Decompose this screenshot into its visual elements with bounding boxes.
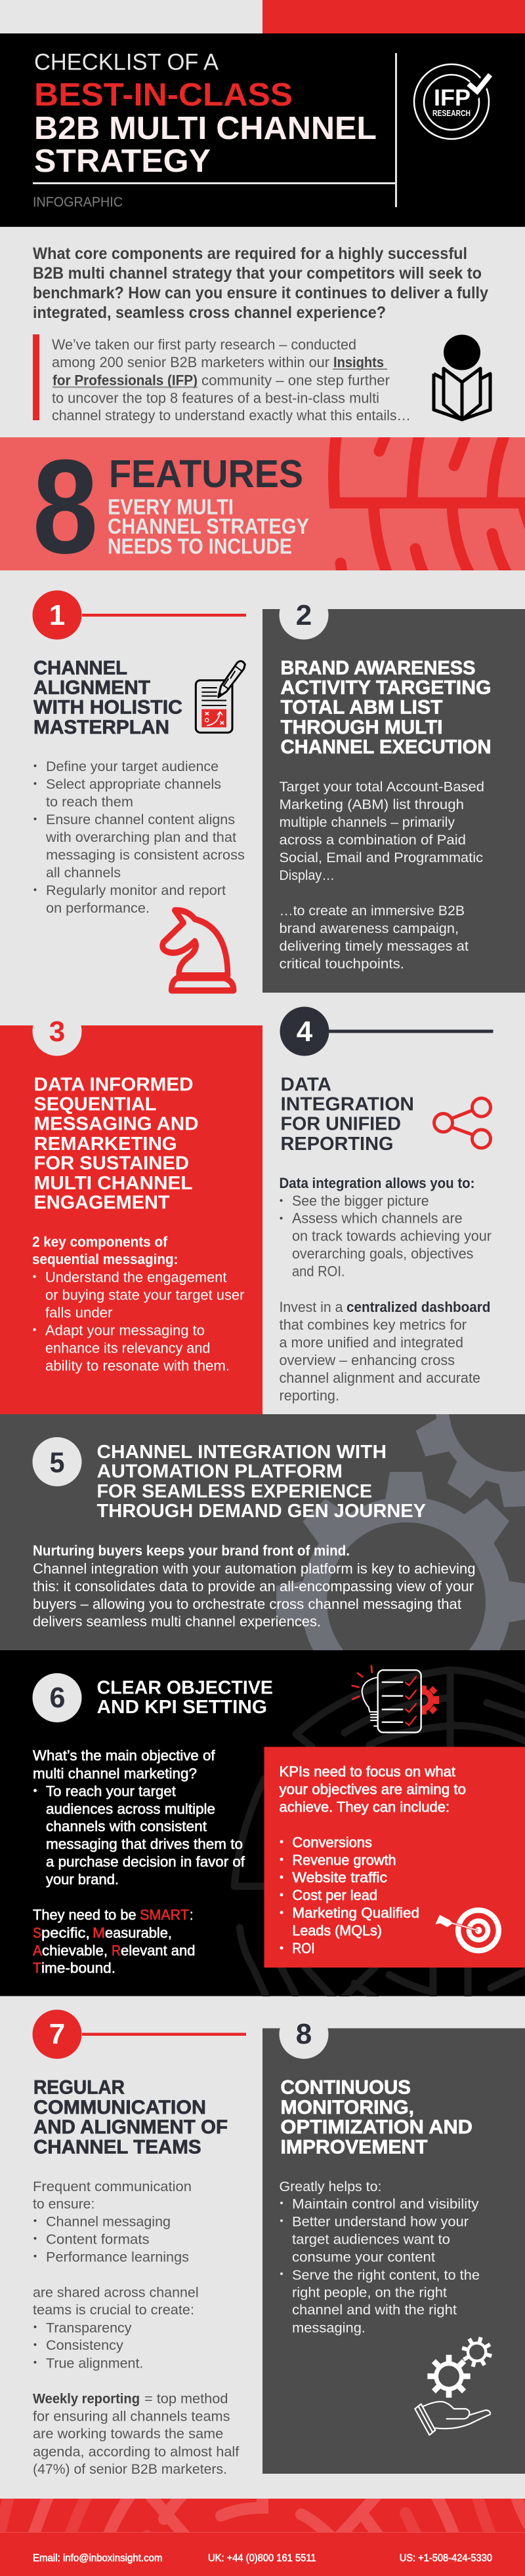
big number 8: 8 bbox=[33, 432, 98, 582]
body text 6: audiences across multiple bbox=[46, 1800, 215, 1817]
heading 2: TOTAL ABM LIST bbox=[281, 697, 442, 719]
body text 2: delivering timely messages at bbox=[280, 939, 469, 954]
body text 3: 2 key components of bbox=[32, 1234, 168, 1250]
panel: KPI callout: Website traffic bbox=[292, 1869, 387, 1886]
heading 7: CHANNEL TEAMS bbox=[33, 2136, 201, 2158]
decorative gears bbox=[276, 1414, 525, 1650]
intro question: B2B multi channel strategy that your competitors will seek to bbox=[33, 264, 482, 283]
icon: chess knight bbox=[163, 910, 234, 991]
body text 3 bbox=[32, 1234, 244, 1374]
body text 8: Serve the right content, to the bbox=[292, 2268, 480, 2283]
decorative footer pattern bbox=[0, 2499, 525, 2532]
body text 6: What’s the main objective of bbox=[33, 1747, 215, 1764]
body text 7: for ensuring all channels teams bbox=[33, 2409, 230, 2425]
body text 5: this: it consolidates data to provide an all-encompassing view of your bbox=[33, 1578, 474, 1595]
title: B2B MULTI CHANNEL bbox=[34, 111, 377, 146]
body text 3: sequential messaging: bbox=[32, 1251, 178, 1267]
panel: feature 4 bbox=[280, 1007, 494, 1404]
body text 2: Target your total Account-Based bbox=[280, 780, 484, 795]
icon: IFP research logo: IFP bbox=[434, 85, 471, 111]
number badge 5 bbox=[33, 1437, 81, 1486]
panel: KPI callout: ROI bbox=[292, 1940, 315, 1956]
body text 4: centralized dashboard bbox=[346, 1299, 490, 1315]
body text 6: channels with consistent bbox=[46, 1818, 207, 1834]
icon: gears above hand bbox=[415, 2337, 492, 2435]
heading 8 bbox=[281, 2077, 472, 2158]
body text 6: easurable, bbox=[105, 1924, 172, 1941]
number badge 8 bbox=[280, 2010, 328, 2059]
contact details: US: +1-508-424-5330 bbox=[400, 2552, 492, 2564]
heading 2: ACTIVITY TARGETING bbox=[281, 677, 491, 698]
heading 2: THROUGH MULTI bbox=[281, 717, 442, 738]
body text 6: pecific, bbox=[41, 1924, 90, 1941]
body text 8: consume your content bbox=[292, 2250, 435, 2265]
heading 4: DATA bbox=[281, 1075, 331, 1096]
icon: bulb checklist and gear bbox=[352, 1666, 439, 1732]
body text 8: target audiences want to bbox=[292, 2232, 450, 2247]
bullet list 1: Regularly monitor and report bbox=[46, 883, 226, 898]
panel: KPI callout: Conversions bbox=[292, 1834, 372, 1850]
icon: share nodes bbox=[434, 1098, 491, 1148]
body text 8: Greatly helps to: bbox=[280, 2179, 382, 2194]
heading 7: REGULAR bbox=[33, 2077, 125, 2099]
intro question bbox=[33, 245, 488, 322]
bullet list 1: with overarching plan and that bbox=[45, 830, 236, 845]
body text 7: (47%) of senior B2B marketers. bbox=[33, 2462, 227, 2477]
panel: 8 features banner bbox=[0, 437, 525, 570]
heading 3: DATA INFORMED bbox=[34, 1075, 193, 1096]
bullet list 1: Define your target audience bbox=[46, 759, 219, 774]
intro question: What core components are required for a highly successful bbox=[33, 245, 467, 263]
body text 4: overview – enhancing cross bbox=[280, 1352, 455, 1368]
title: BEST-IN-CLASS bbox=[34, 77, 293, 113]
heading 2: CHANNEL EXECUTION bbox=[281, 736, 491, 758]
body text 7: True alignment. bbox=[46, 2356, 143, 2371]
body text 7: Consistency bbox=[46, 2338, 123, 2353]
body text 7: Content formats bbox=[46, 2232, 150, 2247]
intro paragraph: We’ve taken our first party research – conducted bbox=[52, 336, 356, 353]
body text 5 bbox=[33, 1543, 475, 1630]
number badge 7: 7 bbox=[49, 2018, 65, 2050]
body text 7: Channel messaging bbox=[46, 2215, 171, 2230]
number badge 1: 1 bbox=[49, 599, 65, 631]
body text 6: elevant and bbox=[121, 1942, 195, 1958]
body text 4: channel alignment and accurate bbox=[280, 1370, 480, 1386]
icon: IFP research logo: RESEARCH bbox=[432, 108, 471, 118]
heading 4 bbox=[281, 1075, 414, 1155]
bullet list 1: all channels bbox=[46, 865, 121, 881]
body text 6: S bbox=[33, 1924, 41, 1941]
body text 6: : bbox=[190, 1907, 193, 1923]
body text 4: Assess which channels are bbox=[292, 1210, 463, 1227]
body text 4: See the bigger picture bbox=[292, 1193, 429, 1209]
bullet list 1: messaging is consistent across bbox=[46, 848, 245, 863]
body text 6: a purchase decision in favor of bbox=[46, 1853, 245, 1870]
body text 4: a more unified and integrated bbox=[280, 1334, 463, 1351]
heading 1: WITH HOLISTIC bbox=[33, 697, 182, 719]
heading 3 bbox=[34, 1075, 198, 1214]
panel: KPI callout bbox=[264, 1747, 525, 1968]
body text 8: messaging. bbox=[292, 2321, 366, 2335]
heading 7: COMMUNICATION bbox=[33, 2097, 206, 2118]
bullet list 1: to reach them bbox=[46, 795, 133, 810]
heading 1: MASTERPLAN bbox=[33, 717, 169, 738]
contact details: UK: +44 (0)800 161 5511 bbox=[208, 2552, 316, 2564]
body text 4 bbox=[280, 1175, 492, 1404]
body text 2: Social, Email and Programmatic bbox=[280, 850, 483, 865]
body text 8: Maintain control and visibility bbox=[292, 2196, 479, 2212]
panel: feature 2 bbox=[262, 590, 525, 993]
heading 8: OPTIMIZATION AND bbox=[281, 2116, 472, 2138]
intro paragraph: among 200 senior B2B marketers within our bbox=[52, 354, 329, 370]
body text 8 bbox=[280, 2179, 480, 2335]
bullet list 1: on performance. bbox=[46, 901, 150, 916]
body text 5: Channel integration with your automation platform is key to achieving bbox=[33, 1560, 475, 1577]
body text 2: Marketing (ABM) list through bbox=[280, 797, 464, 812]
bullet list 1 bbox=[34, 759, 245, 916]
subheading bbox=[108, 495, 309, 559]
heading 5: AUTOMATION PLATFORM bbox=[97, 1461, 343, 1482]
heading 3: REMARKETING bbox=[34, 1134, 177, 1155]
panel: feature 8 bbox=[262, 2010, 525, 2474]
panel: feature 7 bbox=[33, 2010, 246, 2477]
body text 2 bbox=[280, 780, 484, 972]
panel: header bbox=[0, 33, 525, 227]
intro paragraph bbox=[33, 334, 411, 424]
subheading: EVERY MULTI bbox=[108, 495, 234, 519]
body text 7: Performance learnings bbox=[46, 2250, 189, 2265]
heading 5: CHANNEL INTEGRATION WITH bbox=[97, 1442, 387, 1463]
panel: feature 3 bbox=[0, 1007, 262, 1415]
panel: feature 1 bbox=[33, 590, 246, 991]
body text 7: are shared across channel bbox=[33, 2286, 199, 2301]
body text 6: T bbox=[33, 1960, 41, 1976]
panel: feature 6 bbox=[0, 1650, 525, 2000]
body text 6: your brand. bbox=[46, 1871, 119, 1888]
number badge 2 bbox=[280, 590, 328, 640]
body text 2: brand awareness campaign, bbox=[280, 921, 459, 936]
body text 6: M bbox=[93, 1924, 105, 1941]
body text 5: buyers – allowing you to orchestrate cross channel messaging that bbox=[33, 1596, 461, 1612]
panel: KPI callout: Marketing Qualified bbox=[292, 1905, 419, 1921]
body text 4: Data integration allows you to: bbox=[280, 1175, 475, 1191]
body text 2: multiple channels – primarily bbox=[280, 815, 455, 830]
heading 3: MESSAGING AND bbox=[34, 1114, 198, 1135]
body text 6: ime-bound. bbox=[41, 1960, 116, 1976]
body text 3: ability to resonate with them. bbox=[45, 1358, 230, 1374]
icon: IFP research logo bbox=[414, 64, 490, 139]
body text 7: Frequent communication bbox=[33, 2179, 192, 2194]
heading: FEATURES bbox=[109, 452, 303, 496]
panel: KPI callout: Cost per lead bbox=[292, 1887, 377, 1903]
body text 6: R bbox=[112, 1942, 121, 1958]
body text 8: Better understand how your bbox=[292, 2215, 469, 2230]
heading 3: ENGAGEMENT bbox=[34, 1193, 170, 1214]
number badge 4 bbox=[280, 1007, 329, 1056]
body text 4: and ROI. bbox=[292, 1263, 345, 1280]
title: CHECKLIST OF A bbox=[34, 50, 219, 75]
intro paragraph: channel strategy to understand exactly what this entails… bbox=[52, 407, 411, 424]
intro paragraph: community – one step further bbox=[201, 372, 390, 388]
body text 2: …to create an immersive B2B bbox=[280, 903, 465, 919]
body text 4: overarching goals, objectives bbox=[292, 1246, 473, 1262]
icon: plan document and pencil bbox=[196, 661, 245, 732]
heading 2 bbox=[281, 658, 491, 758]
decorative maze bbox=[334, 433, 525, 577]
body text 2: Display… bbox=[280, 868, 335, 883]
heading 5 bbox=[97, 1442, 426, 1522]
subheading: CHANNEL STRATEGY bbox=[108, 514, 309, 538]
number badge 3: 3 bbox=[49, 1016, 65, 1048]
body text 5: Nurturing buyers keeps your brand front of mind. bbox=[33, 1543, 350, 1559]
body text 4: reporting. bbox=[280, 1387, 339, 1404]
heading 8: MONITORING, bbox=[281, 2097, 414, 2118]
number badge 1 bbox=[33, 590, 81, 640]
intro paragraph: Insights bbox=[333, 354, 384, 370]
body text 8: right people, on the right bbox=[292, 2286, 447, 2301]
number badge 5: 5 bbox=[50, 1446, 64, 1479]
heading 8: CONTINUOUS bbox=[281, 2077, 411, 2099]
body text 4: Invest in a bbox=[280, 1299, 343, 1315]
heading 8: IMPROVEMENT bbox=[281, 2136, 428, 2158]
body text 6: SMART bbox=[140, 1907, 189, 1923]
body text 7: teams is crucial to create: bbox=[33, 2303, 194, 2318]
body text 5: delivers seamless multi channel experiences. bbox=[33, 1614, 321, 1630]
panel: KPI callout: Leads (MQLs) bbox=[292, 1922, 382, 1939]
body text 4: that combines key metrics for bbox=[280, 1317, 467, 1333]
heading 5: FOR SEAMLESS EXPERIENCE bbox=[97, 1481, 372, 1502]
number badge 2: 2 bbox=[296, 599, 312, 631]
footer bbox=[0, 2495, 525, 2576]
heading 6: AND KPI SETTING bbox=[97, 1697, 267, 1718]
intro paragraph: to uncover the top 8 features of a best-in-class multi bbox=[52, 389, 379, 406]
panel: KPI callout: KPIs need to focus on what bbox=[280, 1763, 455, 1779]
body text 6: chievable, bbox=[42, 1942, 108, 1958]
body text 7: Transparency bbox=[46, 2321, 132, 2335]
panel: feature 5 bbox=[0, 1414, 525, 1650]
heading 1: ALIGNMENT bbox=[33, 677, 150, 698]
subtitle: INFOGRAPHIC bbox=[33, 195, 123, 210]
body text 4: on track towards achieving your bbox=[292, 1228, 492, 1244]
top colour band bbox=[0, 0, 525, 33]
body text 6: multi channel marketing? bbox=[33, 1765, 197, 1781]
title: STRATEGY bbox=[34, 144, 211, 179]
heading 3: SEQUENTIAL bbox=[34, 1094, 157, 1115]
body text 6: messaging that drives them to bbox=[46, 1836, 243, 1852]
body text 3: falls under bbox=[45, 1304, 112, 1320]
body text 3: or buying state your target user bbox=[45, 1286, 244, 1303]
panel: KPI callout: achieve. They can include: bbox=[280, 1798, 450, 1815]
body text 3: enhance its relevancy and bbox=[45, 1340, 210, 1357]
bullet list 1: Ensure channel content aligns bbox=[46, 812, 235, 827]
number badge 3 bbox=[33, 1007, 81, 1056]
body text 8: channel and with the right bbox=[292, 2303, 457, 2318]
panel: KPI callout: your objectives are aiming to bbox=[280, 1781, 466, 1798]
heading 2: BRAND AWARENESS bbox=[281, 658, 475, 679]
body text 6: They need to be bbox=[33, 1907, 136, 1923]
contact details bbox=[33, 2552, 492, 2564]
decorative maze bbox=[234, 1670, 525, 2000]
heading 6 bbox=[97, 1677, 273, 1718]
heading 4: REPORTING bbox=[281, 1134, 394, 1155]
heading 1: CHANNEL bbox=[33, 658, 127, 679]
bullet list 1: Select appropriate channels bbox=[46, 777, 221, 792]
number badge 8: 8 bbox=[296, 2018, 312, 2050]
heading 5: THROUGH DEMAND GEN JOURNEY bbox=[97, 1501, 426, 1522]
heading 4: INTEGRATION bbox=[281, 1094, 414, 1115]
body text 7: = top method bbox=[144, 2391, 228, 2406]
number badge 6: 6 bbox=[50, 1682, 66, 1714]
body text 7: are working towards the same bbox=[33, 2427, 223, 2442]
body text 6: A bbox=[33, 1942, 42, 1958]
heading 3: FOR SUSTAINED bbox=[34, 1153, 189, 1174]
number badge 7 bbox=[33, 2010, 81, 2059]
number badge 4: 4 bbox=[297, 1016, 313, 1048]
panel: KPI callout: Revenue growth bbox=[292, 1852, 396, 1868]
body text 3: Understand the engagement bbox=[45, 1269, 226, 1285]
body text 7 bbox=[33, 2179, 239, 2477]
heading 7: AND ALIGNMENT OF bbox=[33, 2116, 228, 2138]
heading 7 bbox=[33, 2077, 228, 2158]
body text 7: Weekly reporting bbox=[33, 2391, 140, 2406]
icon: target and arrow bbox=[435, 1907, 501, 1953]
intro question: integrated, seamless cross channel experience? bbox=[33, 304, 386, 322]
body text 7: agenda, according to almost half bbox=[33, 2444, 239, 2459]
body text 3: Adapt your messaging to bbox=[45, 1322, 205, 1339]
body text 2: critical touchpoints. bbox=[280, 957, 404, 972]
body text 6 bbox=[33, 1747, 245, 1976]
intro paragraph: for Professionals (IFP) bbox=[52, 372, 198, 388]
contact details: Email: info@inboxinsight.com bbox=[33, 2552, 163, 2564]
heading 4: FOR UNIFIED bbox=[281, 1114, 401, 1135]
heading 3: MULTI CHANNEL bbox=[34, 1173, 193, 1194]
icon: person reading book bbox=[434, 334, 490, 420]
title bbox=[34, 50, 377, 179]
heading 1 bbox=[33, 658, 182, 738]
subheading: NEEDS TO INCLUDE bbox=[108, 534, 292, 559]
body text 7: to ensure: bbox=[33, 2196, 94, 2212]
heading 6: CLEAR OBJECTIVE bbox=[97, 1677, 273, 1698]
intro question: benchmark? How can you ensure it continues to deliver a fully bbox=[33, 284, 488, 302]
body text 2: across a combination of Paid bbox=[280, 833, 466, 848]
number badge 6 bbox=[33, 1673, 81, 1722]
body text 6: To reach your target bbox=[46, 1783, 176, 1799]
